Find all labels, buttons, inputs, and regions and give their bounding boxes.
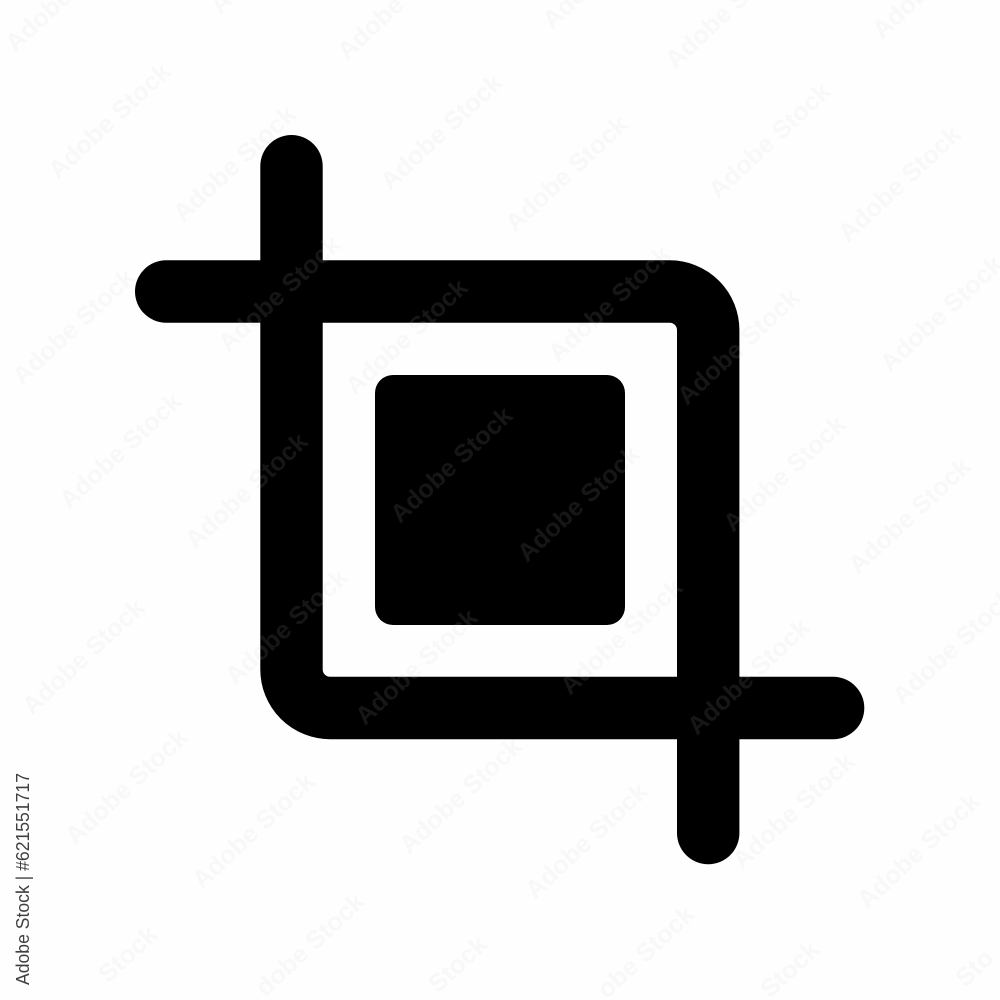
crop frame: vertical handle with bottom edge	[292, 166, 833, 708]
watermark pattern: Adobe Stock	[852, 787, 985, 914]
icon: crop tool	[166, 166, 833, 833]
watermark pattern: Adobe Stock	[350, 603, 483, 730]
watermark pattern: Adobe Stock	[220, 563, 353, 690]
watermark pattern: Adobe Stock	[187, 767, 320, 894]
watermark pattern: Adobe Stock	[340, 273, 473, 400]
watermark pattern: Adobe Stock	[394, 732, 527, 859]
watermark pattern: dobe Stock	[250, 888, 370, 1000]
watermark pattern: Adobe Stock	[54, 387, 187, 514]
watermark pattern: Adobe Stock	[60, 723, 193, 850]
watermark pattern: Adobe Stock	[43, 57, 176, 184]
watermark pattern: Sto	[950, 944, 999, 992]
watermark pattern: Stock	[93, 920, 163, 988]
watermark pattern: Stock	[423, 930, 493, 998]
watermark pattern: Adobe Stock	[17, 593, 150, 720]
watermark pattern: Adobe Stock	[543, 240, 676, 367]
watermark pattern: Adobe Stock	[703, 77, 836, 204]
watermark pattern: Adobe Stock	[385, 401, 518, 528]
watermark pattern: Adobe Stock	[843, 452, 976, 579]
watermark pattern: Adobe Stock	[512, 440, 645, 567]
watermark pattern: Adobe Stock	[555, 573, 688, 700]
watermark pattern: Adobe Stock	[520, 777, 653, 904]
watermark pattern: Adobe Stock	[727, 747, 860, 874]
watermark pattern: Adobe Stock	[672, 283, 805, 410]
watermark pattern: Adobe Stock	[718, 410, 851, 537]
center square	[375, 375, 625, 625]
crop frame: horizontal handle with right edge	[166, 292, 708, 833]
watermark pattern: Adobe Stock	[375, 68, 508, 195]
watermark pattern: Adobe Stock	[833, 120, 966, 247]
watermark pattern: Adobe Stock	[168, 100, 301, 227]
watermark pattern: Adobe Stock	[7, 263, 140, 390]
watermark pattern: Adobe Stock	[682, 613, 815, 740]
stock image id label: Adobe Stock | #621551717	[13, 773, 33, 985]
watermark pattern: Adobe Stock	[180, 427, 313, 554]
watermark pattern: Adobe Stock	[213, 230, 346, 357]
watermark pattern: Adobe Stock	[500, 110, 633, 237]
